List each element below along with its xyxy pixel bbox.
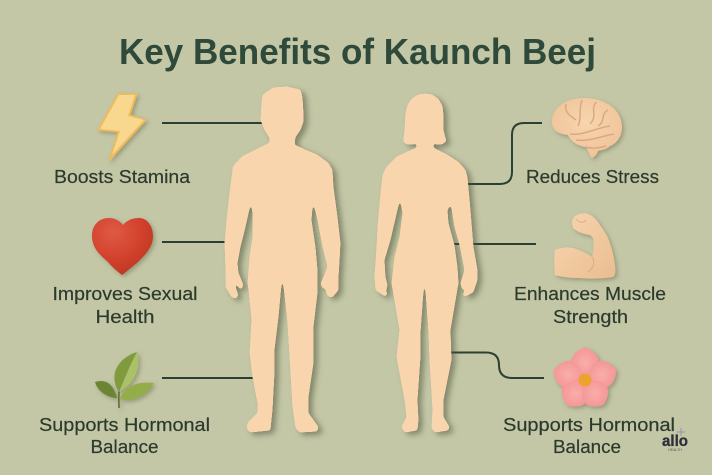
line: stress to female body (465, 123, 542, 184)
label: Balance (553, 436, 621, 457)
female body figure (375, 94, 477, 432)
line: stamina to male head (162, 122, 262, 124)
benefit: improves sexual health (52, 218, 198, 327)
label: Boosts Stamina (54, 166, 191, 187)
male body figure (225, 87, 340, 432)
benefit: supports hormonal balance (right) (503, 347, 675, 457)
icon: flexed arm (554, 213, 615, 279)
line: sexual health to male body (162, 241, 227, 243)
label: Health (96, 306, 154, 327)
logo: allo health (662, 428, 688, 452)
logo: allo health: allo (662, 433, 688, 450)
benefit: enhances muscle strength (514, 213, 666, 327)
label: Reduces Stress (526, 166, 659, 187)
icon: heart (92, 218, 153, 275)
benefit: supports hormonal balance (left) (39, 352, 210, 457)
icon: brain (552, 98, 622, 158)
benefit: boosts stamina (54, 94, 191, 187)
icon: lightning bolt (98, 94, 146, 161)
title: Key Benefits of Kaunch Beej (119, 31, 596, 72)
line: muscle to female body (452, 243, 536, 245)
icon: pink flower (549, 347, 621, 413)
benefit: reduces stress (526, 98, 659, 187)
connector lines (162, 123, 544, 378)
label: Improves Sexual (52, 283, 198, 304)
label: Enhances Muscle (514, 283, 666, 304)
line: hormonal balance to female leg (450, 352, 544, 378)
line: hormonal balance to male leg (162, 377, 254, 379)
label: Strength (553, 306, 628, 327)
label: Supports Hormonal (503, 414, 675, 435)
logo: allo health: HEALTH (668, 448, 682, 452)
icon: green leaves (95, 352, 154, 408)
label: Balance (90, 436, 158, 457)
label: Supports Hormonal (39, 414, 210, 435)
